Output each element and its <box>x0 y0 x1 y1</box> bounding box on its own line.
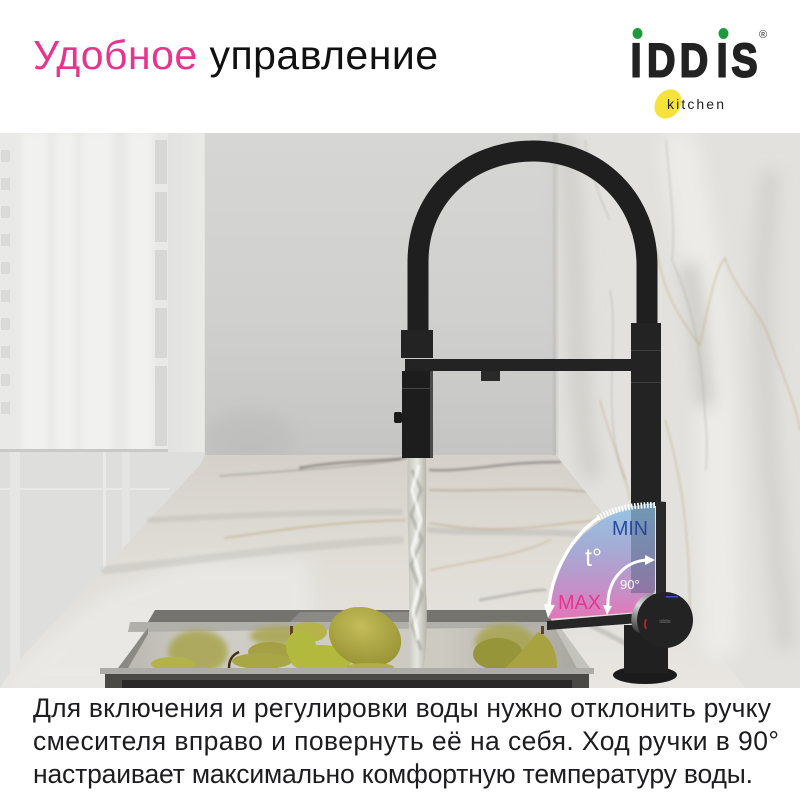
spray button <box>394 412 402 423</box>
sink front rim <box>100 668 594 674</box>
label MIN: MIN <box>612 518 648 540</box>
label t°: t° <box>585 544 602 572</box>
curtain bottom band <box>0 449 168 452</box>
photo: kitchen scene <box>0 133 800 688</box>
sink back edge <box>148 610 552 622</box>
label MAX: MAX <box>558 592 601 614</box>
logo: IDDIS kitchen <box>631 28 767 124</box>
label 90°: 90° <box>620 577 640 592</box>
marble side wall <box>556 133 800 688</box>
chrome ring <box>625 588 667 638</box>
temperature gauge <box>544 503 655 619</box>
title: Удобное управление <box>33 32 438 78</box>
vertical handle position <box>656 501 666 596</box>
sink front body <box>105 674 589 688</box>
water stream <box>407 458 427 668</box>
outer arrow <box>544 517 600 618</box>
mixer body <box>624 625 668 673</box>
marble countertop <box>0 455 745 688</box>
blurred pear reflections <box>168 624 535 674</box>
red and blue marks <box>645 619 646 629</box>
horizontal handle <box>547 613 640 630</box>
mixer body and handle <box>547 501 693 684</box>
sink with pears <box>100 607 594 688</box>
handle knob <box>637 592 693 648</box>
faucet spout head <box>401 330 433 358</box>
corner shadow <box>553 133 558 455</box>
mixer base disc <box>613 668 677 684</box>
faucet right column <box>631 323 661 506</box>
back wall <box>200 133 570 463</box>
sink side edges <box>118 628 148 668</box>
pears <box>151 607 557 668</box>
side wall <box>168 133 204 463</box>
sink interior <box>118 626 578 670</box>
wall shadow near corner <box>205 410 295 470</box>
yellow spot <box>649 84 687 124</box>
faucet <box>394 151 661 506</box>
faucet arched hose <box>418 151 647 335</box>
logo sublabel: kitchen <box>667 96 724 112</box>
faucet cross bar <box>405 359 633 371</box>
sink back rim <box>128 622 560 632</box>
window panes through curtain <box>155 140 167 446</box>
inner 90 degree arrow <box>603 555 655 615</box>
outer tick arc <box>598 505 655 518</box>
gauge sector <box>548 503 655 619</box>
logo wordmark: IDDIS <box>631 35 758 87</box>
description text <box>33 693 779 789</box>
registered mark: ® <box>759 29 767 41</box>
description line 3: настраивает максимально комфортную температуру воды. <box>33 759 753 789</box>
logo green dots <box>632 28 728 39</box>
window side wall with curtain <box>0 133 205 692</box>
description line 1: Для включения и регулировки воды нужно отклонить ручку <box>33 693 772 723</box>
curtain <box>0 133 168 452</box>
description line 2: смесителя вправо и повернуть её на себя. Ход ручки в 90° <box>33 726 779 756</box>
knob brand: iddis <box>659 619 671 625</box>
